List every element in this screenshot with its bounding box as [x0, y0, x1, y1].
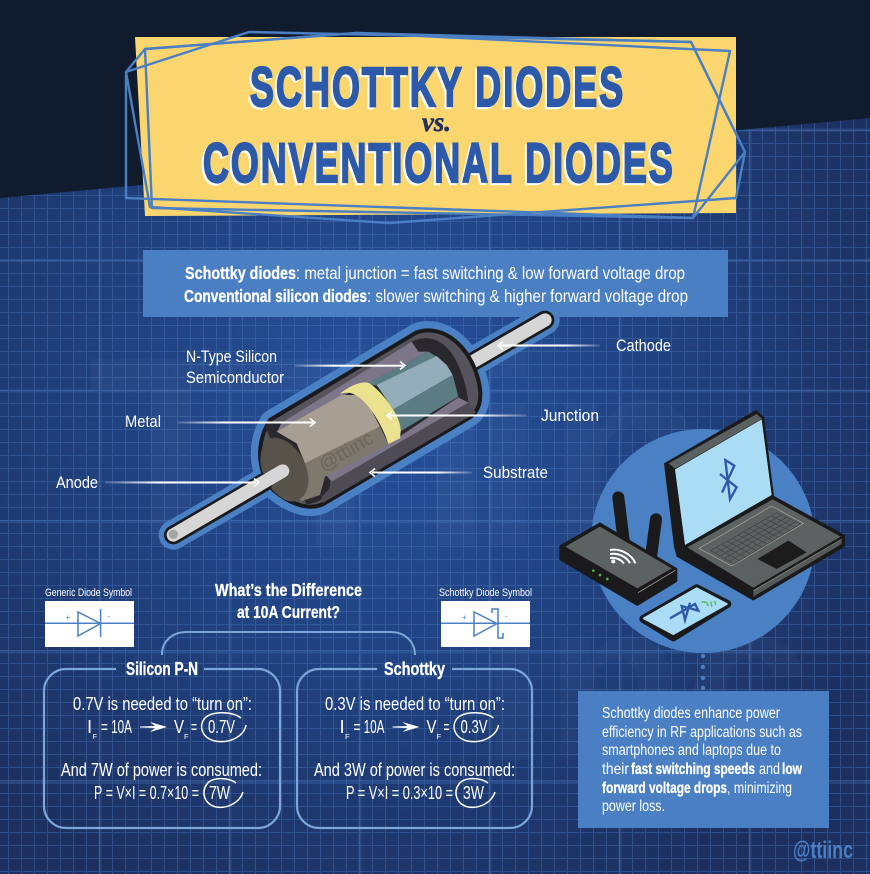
forward current equation: [87, 713, 246, 742]
diode interior dark: [265, 338, 468, 504]
background: blueprint grid: in: [470, 302, 710, 603]
panel heading: Silicon P-N: [126, 659, 198, 679]
icon: generic diode symbol: -: [108, 612, 110, 621]
title line 1: SCHOTTKY DIODES: [248, 57, 621, 120]
arrow: cathode: [498, 342, 600, 350]
callout: RF applications: , minimizing: [727, 780, 792, 797]
arrow: junction: [387, 412, 527, 420]
icon: router: [559, 497, 677, 606]
icon: generic diode symbol: Generic Diode Symbol: [45, 587, 132, 599]
dark top band: [0, 0, 870, 198]
label: junction: Junction: [541, 406, 599, 425]
background: blueprint grid: TTI: [88, 302, 493, 603]
callout: RF applications: efficiency in RF applications such as: [602, 724, 802, 741]
purple band bottom: [325, 397, 468, 482]
title line 1: SCHOTTKY DIODES: [250, 55, 623, 118]
comparison heading: [215, 580, 362, 622]
arrow: metal: [178, 418, 315, 426]
diode halo: [173, 320, 545, 535]
callout: RF applications: Schottky diodes enhance power: [602, 705, 780, 722]
forward current equation: =: [191, 716, 197, 737]
summary banner: [143, 250, 728, 317]
forward current equation: 0.3V: [460, 716, 488, 737]
summary banner: Schottky diodes: [185, 263, 296, 283]
callout: RF applications: power loss.: [602, 798, 665, 815]
icon: generic diode symbol: +: [66, 613, 70, 622]
icon: generic diode symbol: [45, 587, 134, 647]
turn-on text: 0.3V is needed to “turn on”:: [325, 693, 505, 714]
icon: laptop: [664, 410, 845, 601]
summary banner: : metal junction = fast switching & low forward voltage drop: [296, 263, 685, 283]
callout: RF applications: their: [602, 761, 629, 778]
forward current equation: F: [345, 732, 350, 741]
bracket connecting panels: [162, 632, 415, 655]
forward current equation: = 10A: [354, 716, 385, 737]
power text: And 3W of power is consumed:: [314, 759, 515, 780]
label: cathode: Cathode: [616, 336, 671, 355]
callout: RF applications: forward voltage drops: [602, 780, 727, 797]
summary banner: : slower switching & higher forward voltage drop: [367, 286, 688, 306]
summary banner: Conventional silicon diodes: [184, 286, 367, 306]
yellow junction ring: [339, 382, 401, 444]
metal cylinder: [277, 395, 388, 502]
forward current equation: 0.7V: [208, 716, 235, 737]
comparison heading: at 10A Current?: [237, 602, 340, 622]
arrow: N-type silicon: [295, 362, 405, 370]
title vs: vs.: [422, 107, 451, 137]
title block: [126, 32, 745, 223]
forward current equation: I: [87, 716, 92, 737]
arrow: substrate: [370, 468, 472, 476]
lead: anode side: [169, 471, 283, 539]
callout: RF applications: and: [759, 761, 780, 778]
icon: schottky diode symbol: +: [462, 613, 467, 622]
diode illustration: [169, 320, 545, 539]
power equation: P = V×I = 0.7×10 =: [94, 782, 199, 803]
label: N-type silicon: Semiconductor: [186, 368, 284, 387]
callout: RF applications: smartphones and laptops due to: [602, 742, 781, 759]
forward current equation: I: [340, 716, 345, 737]
background: blueprint grid: Inc: [480, 552, 812, 809]
power equation: 7W: [209, 782, 230, 803]
callout: RF applications: [578, 691, 829, 828]
forward current equation: V: [174, 716, 185, 737]
power equation: 3W: [463, 782, 484, 803]
device backdrop circle: [591, 429, 815, 653]
forward current equation: V: [426, 716, 437, 737]
semiconductor cylinder: [367, 352, 458, 432]
title frame: geometric outlines: [126, 32, 745, 223]
power equation: P = V×I = 0.3×10 =: [346, 782, 453, 803]
forward current equation: F: [92, 732, 98, 741]
title line 2: CONVENTIONAL DIODES: [203, 131, 673, 194]
icon: schottky diode symbol: -: [505, 612, 508, 621]
devices illustration: [559, 410, 845, 690]
casing wall lower: [322, 403, 476, 503]
purple band top: [277, 342, 428, 431]
diode watermark: @ttiinc: [315, 428, 378, 476]
label: metal: Metal: [125, 412, 161, 431]
metal end cap: [260, 438, 308, 501]
arrow: anode: [105, 478, 259, 486]
panel heading: Schottky: [384, 659, 445, 679]
forward current equation: [340, 713, 498, 742]
label: N-type silicon: [186, 347, 284, 387]
panel: schottky: [297, 659, 532, 828]
diode labels and arrows: [56, 336, 671, 492]
callout: RF applications: fast switching speeds: [631, 761, 755, 778]
title panel: yellow box: [135, 37, 736, 216]
power text: And 7W of power is consumed:: [61, 759, 262, 780]
turn-on text: 0.7V is needed to “turn on”:: [73, 693, 252, 714]
icon: schottky diode symbol: [439, 587, 532, 647]
callout: RF applications: low: [782, 761, 803, 778]
diode body casing: [260, 330, 480, 507]
forward current equation: F: [184, 732, 189, 741]
forward current equation: F: [436, 732, 442, 741]
icon: schottky diode symbol: Schottky Diode Symbol: [439, 587, 532, 599]
panel: silicon P-N: [44, 659, 280, 828]
forward current equation: = 10A: [101, 716, 132, 737]
lead: cathode side: [450, 320, 545, 375]
label: substrate: Substrate: [483, 463, 548, 482]
forward current equation: =: [444, 716, 450, 737]
label: anode: Anode: [56, 473, 98, 492]
connector dots: [701, 654, 705, 690]
comparison heading: What’s the Difference: [215, 580, 362, 600]
icon: phone: [643, 588, 727, 637]
title line 2: CONVENTIONAL DIODES: [201, 133, 671, 196]
label: N-type silicon: N-Type Silicon: [186, 347, 277, 366]
